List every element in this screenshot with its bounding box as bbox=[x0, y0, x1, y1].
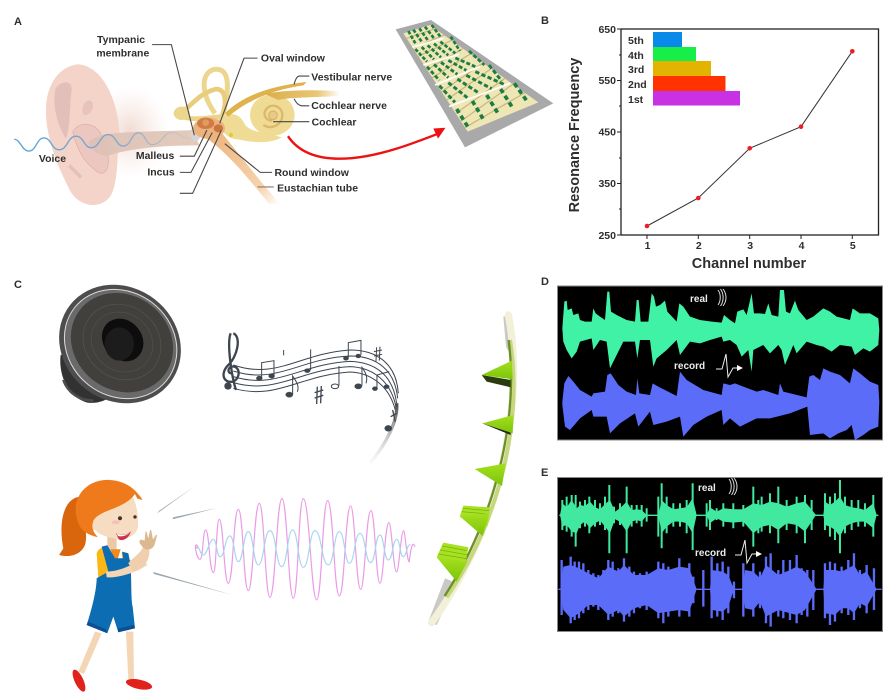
record label with pulse icon: record bbox=[674, 361, 705, 372]
outer ear illustration bbox=[46, 64, 199, 205]
ear labels: Malleus bbox=[136, 151, 174, 162]
record label with pulse icon: record bbox=[695, 548, 726, 559]
real label with sound icon: real bbox=[698, 483, 716, 494]
legs bbox=[78, 632, 102, 674]
arms and hand bbox=[106, 558, 147, 577]
panel letter D: D bbox=[541, 276, 549, 288]
record label with pulse icon bbox=[674, 354, 743, 377]
x tick labels bbox=[645, 240, 856, 252]
ear labels bbox=[39, 35, 392, 195]
panel letter E: E bbox=[541, 467, 548, 479]
x tick labels: 4 bbox=[799, 240, 805, 252]
hair bbox=[76, 480, 143, 537]
cochlear device with cones bbox=[396, 20, 553, 147]
y tick labels: 250 bbox=[598, 230, 616, 242]
shoes bbox=[70, 668, 88, 693]
notes bbox=[256, 376, 262, 381]
overalls bbox=[87, 545, 135, 633]
panel D: waveform comparison bbox=[541, 276, 882, 440]
music score bbox=[224, 333, 398, 463]
ear labels: Eustachian tube bbox=[277, 184, 358, 195]
nerves bbox=[225, 82, 307, 117]
curved sensor with spikes bbox=[428, 315, 514, 625]
panel letter B: B bbox=[541, 15, 549, 27]
eardrum and ossicles bbox=[191, 125, 201, 141]
x tick labels: 5 bbox=[850, 240, 856, 252]
x tick labels: 2 bbox=[696, 240, 702, 252]
voice wave bbox=[14, 132, 189, 151]
inner ear illustration bbox=[174, 69, 340, 204]
axes frame and ticks bbox=[617, 29, 878, 239]
y tick labels: 450 bbox=[598, 126, 616, 138]
girl bbox=[59, 480, 157, 693]
sound waves bbox=[195, 499, 415, 600]
eustachian tube bbox=[207, 131, 280, 204]
recorded waveform E bbox=[558, 553, 882, 627]
legend bars: 4th bbox=[628, 50, 644, 62]
ear labels: Cochlear nerve bbox=[311, 101, 387, 112]
panel E: waveform comparison bbox=[541, 467, 882, 632]
black waveform frame bbox=[558, 286, 882, 440]
record label with pulse icon bbox=[695, 540, 762, 563]
real label with sound icon bbox=[698, 478, 737, 495]
speech lines bbox=[153, 486, 233, 595]
y tick labels: 350 bbox=[598, 178, 616, 190]
leader lines bbox=[152, 45, 309, 193]
panel B: resonance chart bbox=[541, 15, 878, 272]
ear labels: Tympanic bbox=[97, 35, 145, 46]
x tick labels: 1 bbox=[645, 240, 651, 252]
ear labels: Incus bbox=[147, 168, 175, 179]
cochlea spiral bbox=[250, 94, 295, 136]
x tick labels: 3 bbox=[747, 240, 753, 252]
ear labels: membrane bbox=[96, 48, 149, 59]
panel letter A: A bbox=[14, 16, 22, 28]
face bbox=[87, 521, 97, 531]
speaker bbox=[35, 260, 205, 428]
red arrow bbox=[288, 128, 445, 159]
data line bbox=[645, 49, 855, 228]
ear labels: Round window bbox=[274, 168, 350, 179]
y axis title: Resonance Frequency bbox=[567, 58, 583, 212]
ear canal bbox=[89, 130, 199, 156]
y tick labels bbox=[598, 24, 616, 242]
neck and shirt bbox=[107, 535, 117, 552]
black waveform frame bbox=[558, 478, 882, 632]
ear labels: Oval window bbox=[261, 54, 326, 65]
panel A: ear anatomy bbox=[14, 16, 553, 205]
legend bars: 2nd bbox=[628, 79, 647, 91]
ear labels: Voice bbox=[39, 154, 66, 165]
legend bars: 3rd bbox=[628, 64, 644, 76]
y tick labels: 650 bbox=[598, 24, 616, 36]
panel letter C: C bbox=[14, 279, 22, 291]
real label with sound icon bbox=[690, 289, 726, 306]
x axis title: Channel number bbox=[692, 256, 807, 272]
ponytail bbox=[59, 497, 86, 556]
real waveform E bbox=[559, 480, 878, 553]
panel C: sound sources bbox=[14, 260, 514, 693]
y tick labels: 550 bbox=[598, 75, 616, 87]
treble clef bbox=[224, 333, 239, 390]
real waveform D bbox=[562, 290, 879, 372]
ear labels: Vestibular nerve bbox=[311, 72, 392, 83]
ear labels: Cochlear bbox=[312, 117, 356, 128]
real label with sound icon: real bbox=[690, 294, 708, 305]
legend bars: 5th bbox=[628, 35, 644, 47]
recorded waveform D bbox=[562, 368, 879, 440]
legend bars: 1st bbox=[628, 94, 644, 106]
legend bars bbox=[628, 32, 740, 106]
